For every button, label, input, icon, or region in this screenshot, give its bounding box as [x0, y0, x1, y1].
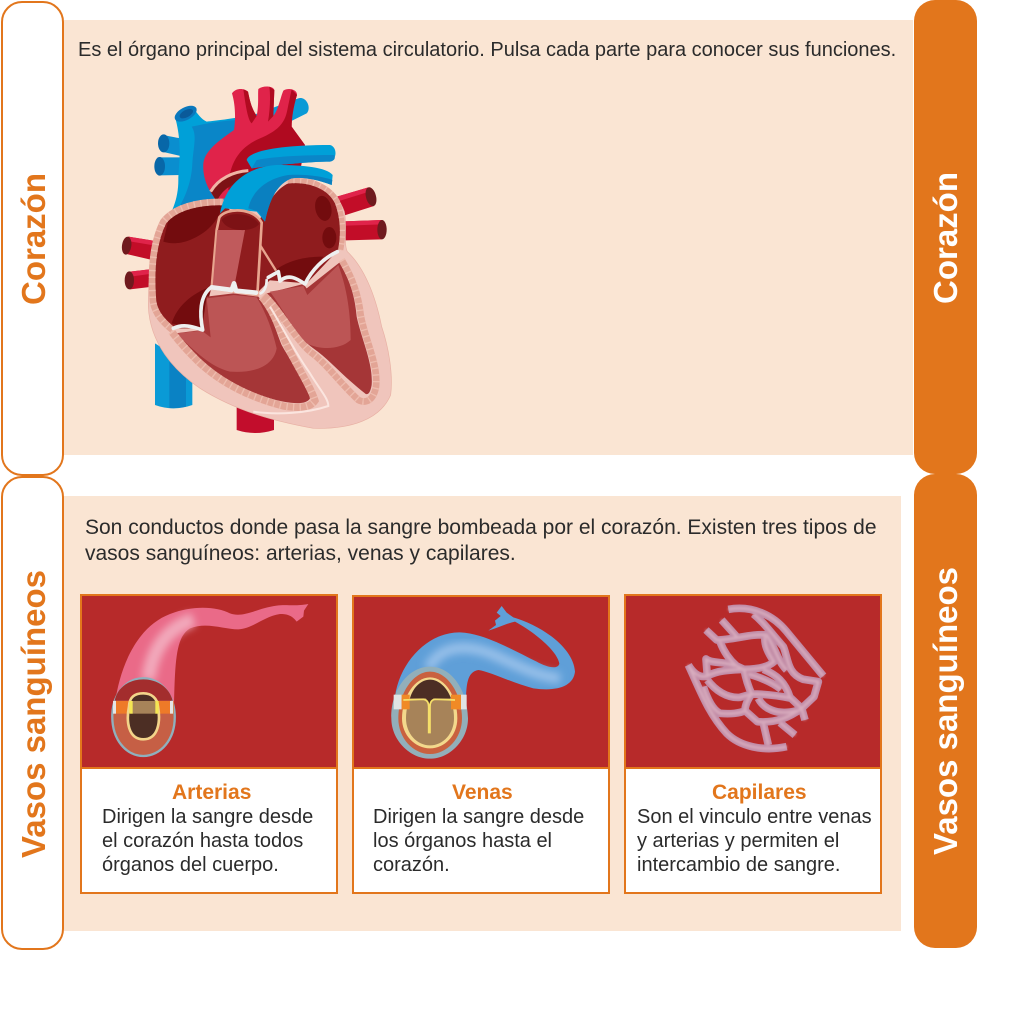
icon: artery cross-section — [112, 678, 175, 756]
icon: lower aorta — [237, 400, 274, 433]
icon: heart body — [148, 177, 391, 428]
left tab: Vasos sanguíneos — [1, 476, 64, 950]
intro text: corazón: Es el órgano principal del sistema circulatorio. Pulsa cada parte para conocer sus funciones. — [78, 39, 896, 61]
icon: side pulmonary vessels — [121, 186, 387, 289]
icon: pulmonary artery blue bands — [220, 145, 336, 222]
tab title: Vasos sanguíneos — [927, 567, 964, 855]
card text: órganos del cuerpo. — [102, 854, 279, 876]
left tab: Corazón — [1, 1, 64, 476]
panel: vasos sanguíneos — [64, 496, 901, 931]
card heading: Capilares — [712, 781, 807, 804]
card text: corazón. — [373, 854, 450, 876]
icon: capillary network — [688, 608, 823, 749]
card text: los órganos hasta el — [373, 830, 552, 852]
icon: artery vessel — [115, 604, 308, 707]
icon: right upper chamber — [258, 181, 343, 287]
card: Venas — [352, 595, 610, 894]
right tab: Vasos sanguíneos — [914, 474, 977, 948]
card: Arterias — [80, 594, 338, 894]
card: Capilares — [624, 594, 882, 894]
icon: vein vessel — [395, 606, 575, 697]
tab title: Vasos sanguíneos — [15, 570, 52, 858]
heart illustration — [122, 86, 392, 433]
icon: heart valves — [173, 252, 337, 330]
intro text: vasos sanguíneos: Son conductos donde pasa la sangre bombeada por el corazón. Existen tres tipos de — [85, 516, 877, 539]
icon: left ventricle — [172, 293, 315, 407]
icon: aortic arch — [203, 86, 305, 202]
illustration: vein — [354, 597, 608, 769]
icon: upper vena cava — [154, 102, 250, 230]
icon: left pulmonary branch — [253, 98, 309, 128]
card heading: Venas — [452, 781, 513, 804]
illustration: capillaries — [626, 596, 880, 769]
card text: Son el vinculo entre venas — [637, 806, 872, 828]
card text — [102, 806, 313, 876]
tab title: Corazón — [926, 172, 964, 304]
icon: right ventricle — [264, 260, 376, 401]
card text: el corazón hasta todos — [102, 830, 303, 852]
tab title: Corazón — [14, 173, 52, 305]
intro text: vasos sanguíneos: vasos sanguíneos: arterias, venas y capilares. — [85, 542, 516, 565]
icon: left upper chamber — [152, 202, 277, 331]
card text: y arterias y permiten el — [637, 830, 839, 852]
icon: pulmonary trunk — [212, 210, 262, 295]
card heading: Arterias — [172, 781, 251, 804]
panel: corazón — [64, 20, 913, 455]
card text — [637, 806, 872, 876]
intro text: vasos sanguíneos — [85, 516, 877, 565]
card text: Dirigen la sangre desde — [373, 806, 584, 828]
illustration: artery — [82, 596, 336, 769]
card text: Dirigen la sangre desde — [102, 806, 313, 828]
card text: intercambio de sangre. — [637, 854, 840, 876]
icon: lower vena cava — [155, 343, 192, 408]
card text — [373, 806, 584, 876]
icon: vein cross-section — [391, 667, 468, 759]
right tab: Corazón — [914, 0, 977, 474]
icon: septum highlight — [253, 307, 328, 413]
